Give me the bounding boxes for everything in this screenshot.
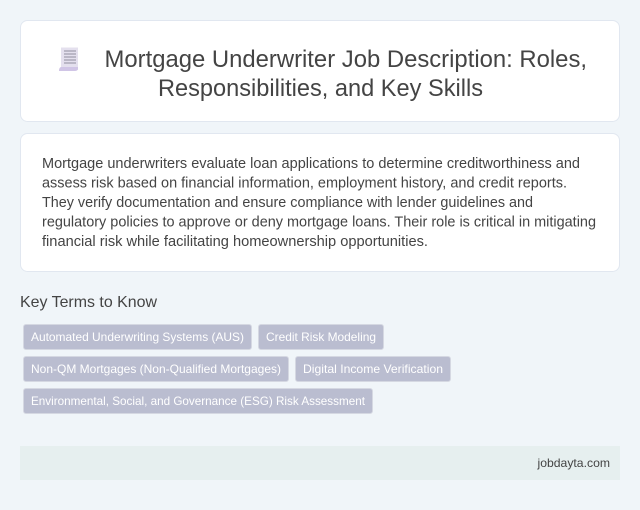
description text: They verify documentation and ensure compliance with lender guidelines and — [42, 195, 533, 211]
panel: description — [20, 134, 620, 272]
footer text: jobdayta.com — [536, 456, 610, 470]
tag: ESG: Environmental, Social, and Governance (ESG) Risk Assessment — [31, 394, 366, 408]
footer bar — [20, 446, 620, 480]
description text: Mortgage underwriters evaluate loan applications to determine creditworthiness and — [42, 156, 580, 172]
tag: AUS — [24, 324, 252, 350]
tag: non-QM: Non-QM Mortgages (Non-Qualified Mortgages) — [31, 362, 281, 376]
description text: assess risk based on financial information, employment history, and credit reports. — [42, 176, 567, 192]
description text: regulatory policies to approve or deny mortgage loans. Their role is critical in mitigating — [42, 214, 596, 230]
title: Mortgage Underwriter Job Description: Roles, — [104, 46, 587, 73]
tag: AUS: Automated Underwriting Systems (AUS) — [31, 330, 244, 344]
heading: key terms: Key Terms to Know — [20, 294, 157, 311]
icon: document scroll — [59, 48, 78, 71]
description text: financial risk while facilitating homeownership opportunities. — [42, 234, 428, 250]
tag: non-QM — [24, 356, 288, 382]
tag: digital income verification — [296, 356, 450, 382]
description text — [42, 156, 596, 250]
title: Responsibilities, and Key Skills — [158, 75, 483, 102]
tag: ESG — [24, 388, 372, 414]
tag: credit risk modeling — [258, 324, 384, 350]
panel: title card — [20, 20, 620, 122]
tag: digital income verification: Digital Income Verification — [303, 362, 443, 376]
title — [104, 46, 587, 102]
tag: credit risk modeling: Credit Risk Modeling — [266, 330, 376, 344]
